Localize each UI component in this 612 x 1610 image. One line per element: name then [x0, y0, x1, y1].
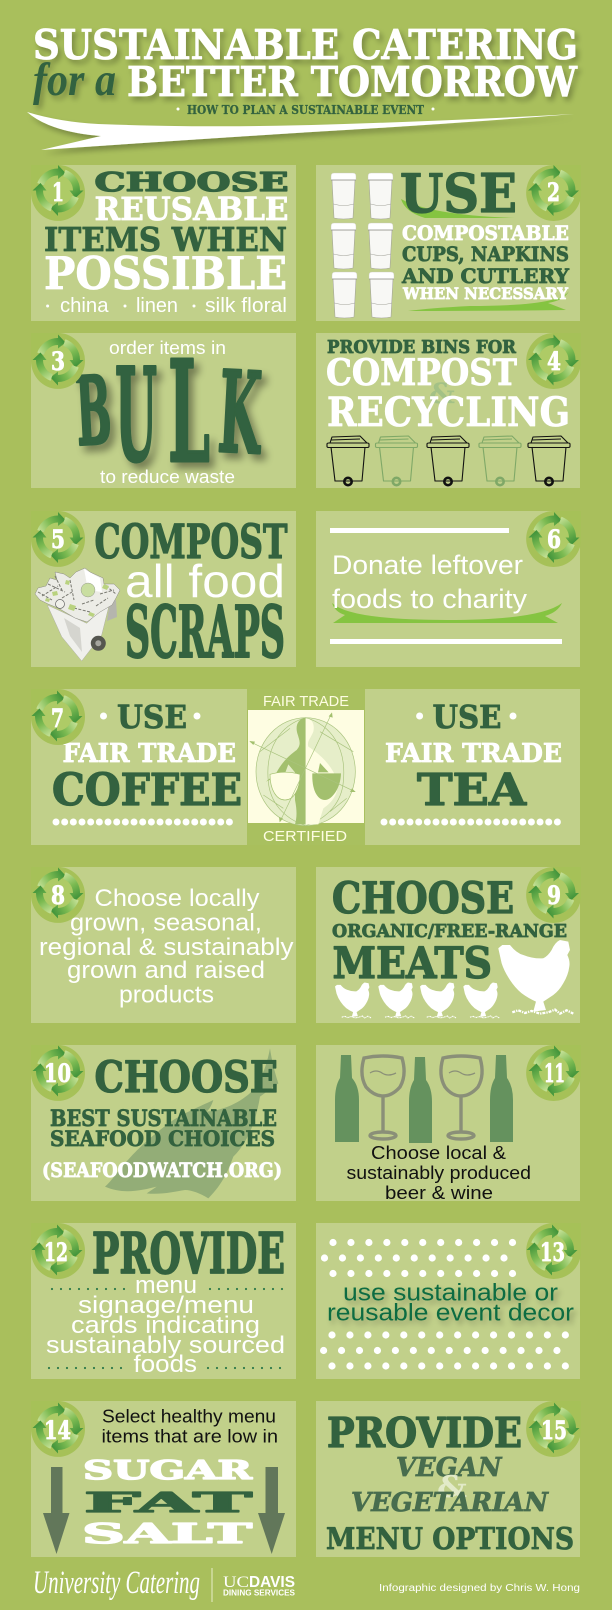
panel 7: fair trade coffee and tea — [31, 689, 580, 845]
message: cards indicating — [71, 1312, 260, 1339]
panel 3: order in bulk: K — [215, 347, 266, 480]
panel 2: use compostable cups — [316, 163, 581, 321]
icon: compost cart — [35, 568, 120, 661]
heading: MENU OPTIONS — [326, 1522, 574, 1557]
message line: Donate leftover — [332, 550, 523, 580]
tea column — [384, 698, 566, 822]
word: salt: SALT — [82, 1519, 252, 1550]
heading: PROVIDE — [92, 1221, 285, 1287]
green swoosh — [401, 199, 515, 218]
coffee column: USE — [117, 698, 187, 736]
panel 5: compost food scraps: SCRAPS — [125, 590, 285, 674]
item list: silk floral — [205, 295, 287, 317]
panel 11: beer and wine — [316, 1045, 581, 1203]
BULK warped word — [73, 331, 266, 495]
heading: AND CUTLERY — [401, 264, 570, 288]
panel 3: order in bulk — [31, 331, 296, 495]
message: reusable event decor — [327, 1300, 574, 1327]
message: sustainably produced — [346, 1163, 531, 1183]
footer divider — [212, 1568, 213, 1602]
subtitle: HOW TO PLAN A SUSTAINABLE EVENT — [187, 103, 424, 117]
fair trade certified logo: FAIR TRADE — [263, 693, 349, 710]
item list — [46, 295, 287, 317]
badge 7 — [31, 689, 85, 745]
title words: for a: for a — [33, 54, 116, 106]
dots pattern bottom — [324, 1335, 567, 1366]
word: sugar: SUGAR — [83, 1456, 253, 1486]
message: foods — [134, 1351, 197, 1378]
caption: to reduce waste — [100, 467, 235, 487]
green swoosh — [408, 291, 569, 311]
panel 4: bins for compost and recycling — [316, 333, 581, 488]
bottom rule — [330, 639, 562, 644]
panel 1: choose reusable items — [31, 165, 296, 321]
badge 2 — [526, 165, 581, 221]
footer: UC Davis logo: UC — [223, 1574, 249, 1591]
message — [327, 1280, 574, 1327]
tea column: FAIR TRADE — [385, 739, 562, 769]
heading: BEST SUSTAINABLE — [50, 1106, 277, 1132]
footer: UC Davis logo: DINING SERVICES — [223, 1588, 296, 1598]
badge 12: 12 — [44, 1238, 68, 1267]
coffee column — [52, 698, 242, 822]
message — [39, 885, 294, 1009]
badge 3 — [31, 333, 85, 389]
coffee column: FAIR TRADE — [62, 739, 236, 769]
heading: all food — [125, 555, 285, 607]
intro text — [102, 1407, 278, 1447]
heading: ITEMS WHEN — [44, 220, 287, 259]
footer: university catering wordmark: University Catering — [33, 1565, 200, 1601]
badge 1 — [31, 165, 85, 221]
panel 6: donate leftovers — [316, 511, 581, 667]
message: use sustainable or — [343, 1280, 558, 1307]
badge 11: 11 — [544, 1059, 565, 1088]
heading: CHOOSE — [94, 1053, 278, 1103]
tea column: USE — [432, 698, 502, 736]
message: signage/menu — [78, 1292, 254, 1319]
coffee column: COFFEE — [52, 765, 242, 816]
intro text: Select healthy menu — [102, 1407, 276, 1427]
fair trade certified logo: CERTIFIED — [263, 828, 347, 845]
heading: REUSABLE — [94, 190, 288, 228]
message: products — [119, 982, 214, 1009]
badge 8 — [31, 867, 85, 923]
icon: hens — [335, 940, 573, 1018]
heading: COMPOSTABLE — [402, 221, 569, 245]
item list: china — [60, 295, 109, 317]
BULK warped word: L — [168, 331, 210, 495]
message: regional & sustainably — [39, 934, 294, 961]
title swoosh — [27, 112, 574, 150]
heading: COMPOST — [94, 515, 288, 570]
heading: RECYCLING — [327, 389, 570, 436]
arrow: down left — [43, 1467, 70, 1554]
heading: SEAFOOD CHOICES — [50, 1126, 275, 1151]
badge 7: 7 — [51, 704, 64, 733]
badge 13 — [526, 1223, 581, 1279]
message: sustainably sourced — [46, 1332, 285, 1359]
badge 13: 13 — [540, 1238, 565, 1267]
panel 5: compost food scraps — [31, 511, 296, 674]
badge 8: 8 — [51, 881, 65, 910]
message: grown and raised — [67, 957, 265, 984]
dots pattern top — [324, 1242, 514, 1274]
message line: foods to charity — [332, 584, 528, 614]
message — [346, 1143, 531, 1203]
ampersand: & — [429, 377, 455, 410]
badge 3: 3 — [51, 347, 65, 376]
top rule — [330, 528, 509, 533]
heading: CUPS, NAPKINS — [402, 242, 569, 266]
message — [46, 1272, 285, 1378]
badge 11 — [526, 1045, 581, 1101]
badge 5 — [31, 511, 85, 567]
heading: COMPOST — [326, 352, 517, 394]
heading: MEATS — [332, 939, 492, 989]
badge 4 — [526, 333, 581, 389]
panel 10: sustainable seafood — [31, 1045, 296, 1201]
panel 14: low sugar fat salt — [31, 1401, 296, 1557]
icon: wine glasses — [362, 1056, 482, 1139]
message: grown, seasonal, — [70, 910, 262, 937]
badge 10 — [31, 1045, 85, 1101]
green swoosh — [332, 603, 562, 623]
word: fat: FAT — [84, 1488, 252, 1519]
badge 10: 10 — [44, 1059, 71, 1088]
heading: ORGANIC/FREE-RANGE — [332, 921, 567, 942]
icon: bottles — [335, 1055, 513, 1143]
badge 2: 2 — [547, 178, 560, 207]
panel 8: local products — [31, 867, 296, 1023]
badge 12 — [31, 1223, 85, 1279]
badge 9: 9 — [547, 881, 561, 910]
tea column: TEA — [417, 765, 527, 816]
heading: CHOOSE — [332, 874, 514, 924]
item list: linen — [136, 295, 178, 317]
message: Choose local & — [371, 1143, 506, 1163]
fair trade certified logo — [247, 689, 365, 845]
panel 13: event decor — [316, 1223, 581, 1379]
message: Choose locally — [94, 885, 260, 912]
BULK warped word: B — [73, 356, 114, 468]
ampersand: & — [437, 1470, 467, 1505]
word: vegan: VEGAN — [396, 1453, 503, 1483]
heading: PROVIDE — [327, 1409, 522, 1457]
badge 15: 15 — [541, 1416, 567, 1445]
heading: USE — [400, 163, 517, 225]
badge 9 — [526, 867, 581, 923]
arrow: down right — [258, 1467, 285, 1554]
badge 6 — [526, 511, 581, 567]
panel 12: menu signage — [31, 1221, 296, 1379]
dotted rules — [49, 1289, 285, 1368]
BULK warped word: U — [115, 341, 157, 491]
icon: fish — [105, 1048, 278, 1198]
panel 15: vegan and vegetarian — [316, 1401, 581, 1557]
badge 14: 14 — [44, 1416, 71, 1445]
icon: bins — [327, 436, 570, 485]
footer: UC Davis logo: DAVIS — [249, 1574, 295, 1591]
message: menu — [135, 1272, 197, 1299]
badge 1: 1 — [52, 178, 64, 207]
panel 9: organic meats — [316, 867, 581, 1023]
title — [33, 21, 578, 106]
footer: designer credit: Infographic designed by Chris W. Hong — [379, 1583, 580, 1594]
heading: WHEN NECESSARY — [402, 284, 569, 303]
heading: POSSIBLE — [44, 247, 287, 300]
badge 5: 5 — [51, 525, 65, 554]
heading: PROVIDE BINS FOR — [327, 337, 517, 358]
footer: UC Davis logo — [223, 1574, 296, 1598]
heading: CHOOSE — [94, 168, 288, 198]
badge 14 — [31, 1401, 85, 1457]
intro text: items that are low in — [102, 1427, 278, 1447]
caption: order items in — [109, 338, 226, 358]
message: beer & wine — [385, 1183, 493, 1203]
web address: (SEAFOODWATCH.ORG) — [42, 1158, 282, 1182]
icon: paper cups — [331, 173, 394, 318]
word: vegetarian: VEGETARIAN — [351, 1488, 549, 1518]
badge 15 — [526, 1401, 581, 1457]
badge 6: 6 — [547, 525, 561, 554]
badge 4: 4 — [547, 347, 561, 376]
